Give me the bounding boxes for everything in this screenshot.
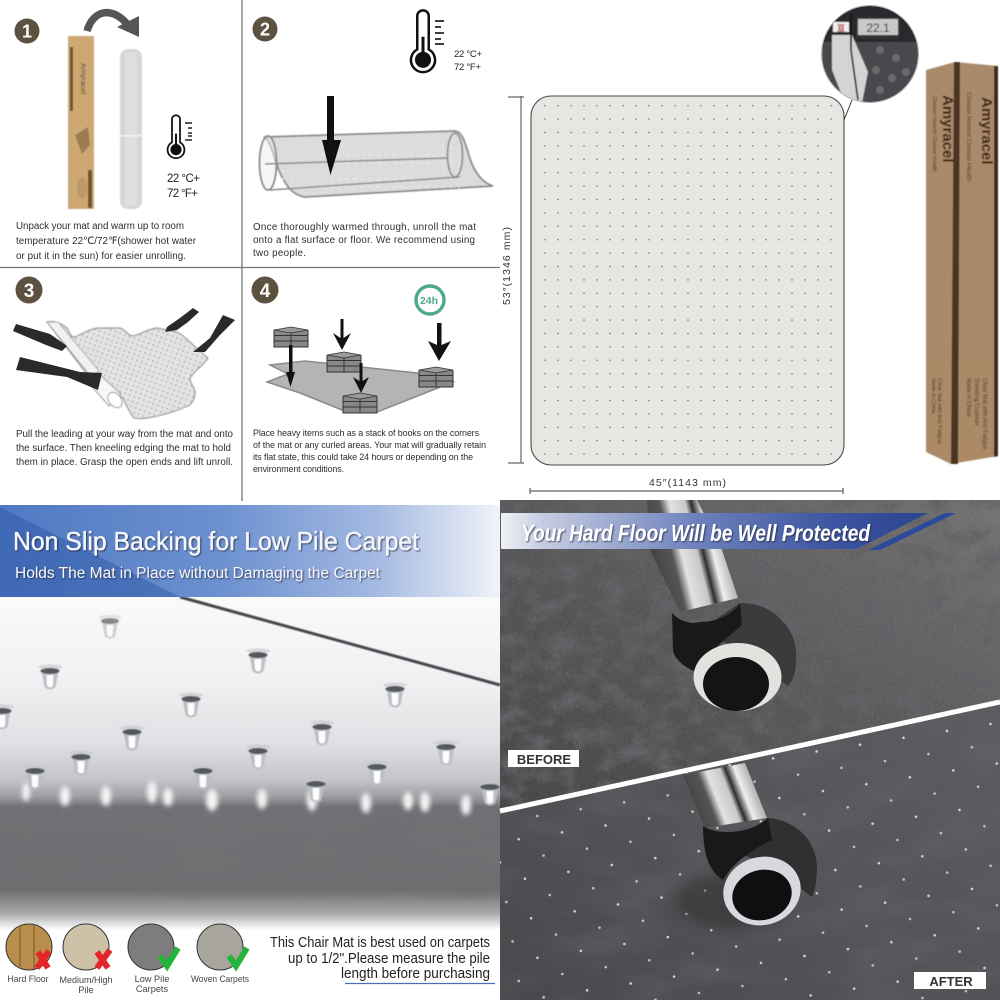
after mat	[500, 700, 1000, 1000]
label: after	[914, 972, 986, 989]
height dimension line	[508, 96, 524, 463]
icon: check	[229, 948, 247, 966]
banner diagonal shade	[0, 507, 180, 597]
banner: protected	[501, 513, 956, 550]
icon: number badge 3: 3	[24, 281, 34, 302]
panel: step 2	[252, 10, 493, 259]
icon: book stack 2	[327, 352, 361, 372]
surface labels	[8, 974, 249, 995]
product box: Amyracel	[978, 97, 995, 165]
text block: step 3 instruction	[16, 429, 234, 468]
callout: thickness gauge magnifier	[822, 5, 920, 103]
illustration: arms and hands	[13, 308, 235, 390]
product box: Standing Cushion	[973, 378, 979, 425]
caster housing	[672, 603, 796, 686]
text block: step 4 instruction: environment conditions.	[253, 464, 344, 474]
icon: thermometer	[411, 10, 435, 72]
caster wheel	[694, 643, 782, 711]
label: before	[508, 750, 579, 767]
diagonal divider	[500, 702, 1000, 811]
callout: thickness gauge magnifier: 亘	[837, 24, 845, 33]
temperature label: 72 °F+	[454, 62, 481, 73]
caster housing	[703, 818, 817, 897]
icon: number badge 2: 2	[260, 20, 270, 40]
panel: installation steps grid	[0, 0, 500, 501]
icon: number badge 4	[252, 276, 278, 304]
panel: mat dimensions	[501, 5, 998, 494]
surface: medium high pile	[63, 924, 110, 970]
text block: step 3 instruction: Pull the leading at your way from the mat and onto	[16, 429, 234, 440]
surface labels: Carpets	[136, 984, 168, 994]
text block: step 3 instruction: the surface. Then kneeling edging the mat to hold	[16, 443, 231, 454]
illustration: unrolling mat	[260, 131, 493, 197]
text block: carpet guidance: This Chair Mat is best used on carpets	[270, 934, 490, 951]
surface labels: Medium/High	[60, 975, 112, 985]
product box: Chair Mat with Anti Fatigue	[981, 378, 987, 450]
text block: step 1 instruction	[16, 221, 197, 262]
carpet blur mottling	[0, 805, 500, 900]
text block: step 2 instruction: onto a flat surface or floor. We recommend using	[253, 235, 475, 246]
icon: number badge 1	[14, 18, 40, 44]
width dimension line	[530, 488, 843, 494]
text block: step 4 instruction: of the mat or any curled areas. Your mat will gradually retain	[253, 440, 486, 450]
subheading: Holds The Mat in Place without Damaging the Carpet	[15, 565, 381, 582]
heading: Non Slip Backing for Low Pile Carpet	[13, 526, 420, 556]
product box: Choose Honest Choose Health	[965, 92, 972, 182]
illustration: curled mat	[267, 361, 453, 412]
text block: step 2 instruction: two people.	[253, 248, 306, 259]
icon: book stack 4	[419, 367, 453, 387]
height label: 53″(1346 mm)	[501, 227, 513, 305]
icon: cross	[37, 951, 49, 968]
product box: Made in China	[930, 378, 936, 414]
chair leg	[647, 500, 738, 612]
temperature label: 22 °C+	[167, 173, 200, 185]
panel: non slip backing	[0, 505, 502, 995]
surface: low pile carpet	[128, 924, 178, 970]
callout: thickness gauge magnifier: 22.1	[866, 21, 890, 35]
panel: step 1	[14, 13, 200, 262]
callout connector	[844, 100, 852, 120]
panel: step 4	[252, 276, 486, 474]
icon: number badge 4: 4	[260, 281, 271, 302]
icon: curved arrow	[87, 13, 139, 37]
icon: check	[160, 948, 178, 966]
surface: woven carpet	[197, 924, 247, 970]
before carpet	[500, 500, 1000, 820]
icon: book stack 3	[343, 393, 377, 413]
panel: before and after photo	[500, 500, 1000, 1000]
arrows: press down	[286, 319, 451, 393]
icon: 24 hour timer	[416, 286, 444, 314]
surface labels: Woven Carpets	[191, 974, 249, 984]
width label: 45″(1143 mm)	[649, 477, 726, 489]
text block: step 4 instruction	[253, 428, 486, 474]
icon: thermometer scale	[435, 21, 444, 44]
mat edge line	[180, 597, 500, 685]
text block: step 2 instruction	[253, 222, 476, 259]
icon: cross	[97, 950, 110, 968]
heading: protected: Your Hard Floor Will be Well Protected	[521, 520, 871, 546]
surface: hard floor	[6, 924, 52, 970]
product box: Amyracel	[939, 95, 956, 163]
text block: step 1 instruction: or put it in the sun) for easier unrolling.	[16, 251, 186, 262]
surface labels: Low Pile	[135, 974, 169, 984]
icon: thermometer scale	[185, 123, 192, 140]
text block: step 4 instruction: its flat state, this could take 24 hours or depending on the	[253, 452, 473, 462]
icon: cardboard box	[68, 36, 94, 209]
text block: carpet guidance	[270, 934, 490, 982]
text block: step 4 instruction: Place heavy items such as a stack of books on the corners	[253, 428, 480, 438]
text block: step 1 instruction: Unpack your mat and warm up to room	[16, 221, 184, 232]
photo background: mat and carpet	[0, 597, 500, 930]
temperature label: 22 °C+	[454, 49, 482, 60]
caster wheel	[723, 856, 801, 926]
chair mat diagram	[531, 96, 844, 465]
text block: step 2 instruction: Once thoroughly warmed through, unroll the mat	[253, 222, 476, 233]
shadow	[674, 869, 759, 932]
arrow: press down	[322, 96, 341, 175]
icon: 24 hour timer: 24h	[420, 295, 438, 307]
text block: carpet guidance: length before purchasing	[341, 965, 490, 982]
text block: step 1 instruction: temperature 22℃/72℉(shower hot water	[16, 236, 197, 247]
underline	[345, 982, 495, 984]
product box: Choose Honest Choose Health	[931, 96, 937, 172]
illustration: mat pegs	[0, 615, 502, 806]
callout ring	[822, 6, 918, 102]
illustration: blurred pegs row	[22, 781, 471, 815]
chair leg	[683, 763, 767, 828]
text block: step 3 instruction: them in place. Grasp the open ends and lift unroll.	[16, 457, 233, 468]
product box	[926, 62, 998, 464]
product box: Made in China	[965, 378, 971, 417]
label: after: AFTER	[929, 974, 973, 989]
surface labels: Pile	[78, 985, 94, 995]
text block: carpet guidance: up to 1/2".Please measure the pile	[288, 950, 490, 967]
icon: thermometer	[168, 115, 184, 158]
illustration: mat being unrolled	[47, 321, 208, 419]
panel: step 3	[13, 276, 235, 468]
product box: Clear Mat with Anti Fatigue	[936, 378, 942, 444]
icon: book stack 1	[274, 327, 308, 347]
icon: number badge 1: 1	[22, 22, 32, 42]
icon: number badge 3	[16, 276, 42, 304]
label: before: BEFORE	[517, 752, 571, 767]
icon: cardboard box: Amyracel	[79, 63, 88, 95]
banner: header	[0, 505, 500, 597]
surface labels: Hard Floor	[8, 974, 48, 984]
temperature label: 72 °F+	[167, 188, 198, 200]
icon: rolled clear mat	[120, 49, 144, 209]
icon: number badge 2	[252, 16, 278, 42]
